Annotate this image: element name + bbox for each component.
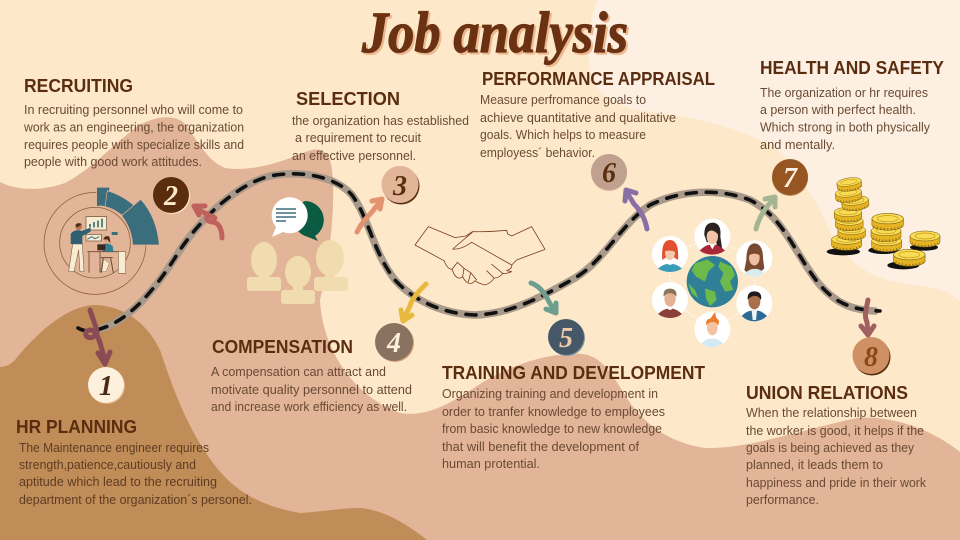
text block: employess´ behavior. <box>480 145 595 160</box>
outer rings <box>44 192 146 294</box>
text block <box>480 92 676 160</box>
background: salmon wave shape <box>0 117 960 540</box>
coin shadows <box>827 244 938 269</box>
badge 8: 8 <box>864 342 878 373</box>
badge 8 <box>852 337 890 376</box>
heading: PERFORMANCE APPRAISAL <box>482 69 715 89</box>
small coin lower <box>894 249 925 266</box>
panel: performance appraisal <box>480 69 715 160</box>
illustration: HR team at work <box>44 187 159 294</box>
panel: health and safety <box>760 58 944 152</box>
background: brown hill <box>0 305 427 540</box>
title: Job analysis <box>363 2 630 67</box>
people silhouettes <box>247 240 348 304</box>
text block: a requirement to recuit <box>295 130 421 145</box>
white speech bubble <box>272 197 308 237</box>
tall stack <box>832 176 869 250</box>
avatar: woman red hair <box>652 236 688 272</box>
panel: selection <box>292 89 469 163</box>
text block: a person with perfect health. <box>760 102 916 117</box>
badge 6: 6 <box>602 158 616 189</box>
badge 3: 3 <box>392 171 407 202</box>
text block: goals is being achieved as they <box>746 440 914 455</box>
arrow 4 <box>401 284 426 321</box>
text block: Measure perfromance goals to <box>480 92 646 107</box>
text block: In recruiting personnel who will come to <box>24 102 243 117</box>
heading: HR PLANNING <box>16 417 137 437</box>
text block <box>23 102 244 169</box>
text block: A compensation can attract and <box>211 364 386 379</box>
illustration: globe with diverse people <box>652 219 772 347</box>
text block: work as an engineering, the organization <box>23 120 244 134</box>
text block: planned, it leads them to <box>746 457 883 472</box>
road: winding path <box>78 174 880 331</box>
avatar: woman brown hair <box>736 240 772 276</box>
middle stack <box>871 213 903 252</box>
badge 4: 4 <box>386 328 401 359</box>
arrow 5 <box>531 283 556 313</box>
arrow 8 <box>861 300 874 335</box>
globe <box>687 256 738 307</box>
heading: TRAINING AND DEVELOPMENT <box>442 363 705 383</box>
text block <box>19 440 252 507</box>
text block <box>746 405 926 507</box>
text block <box>292 113 469 163</box>
heading: RECRUITING <box>24 76 133 96</box>
badge 3 <box>382 166 420 204</box>
text block: department of the organization´s personel. <box>19 492 252 507</box>
text block: people with good work attitudes. <box>24 154 202 169</box>
text block: Organizing training and development in <box>442 386 658 401</box>
heading: COMPENSATION <box>212 337 353 357</box>
arrow 1 <box>86 310 110 364</box>
text block: happiness and pride in their work <box>746 475 926 490</box>
panel: hr planning <box>16 417 252 507</box>
text block: The Maintenance engineer requires <box>19 440 209 455</box>
text block: the worker is good, it helps if the <box>746 423 924 438</box>
panel: compensation <box>211 337 412 414</box>
text block: and increase work efficiency as well. <box>211 399 407 414</box>
heading: HEALTH AND SAFETY <box>760 58 944 78</box>
badge 2: 2 <box>163 181 178 212</box>
text block: achieve quantitative and qualitative <box>480 110 676 125</box>
green speech bubble <box>293 201 324 241</box>
connecting dots <box>670 237 754 329</box>
text block: motivate quality personnel to attend <box>211 382 412 397</box>
badge 4 <box>375 323 414 362</box>
text block: performance. <box>746 492 819 507</box>
text block: and mentally. <box>760 137 835 152</box>
seated woman at desk <box>87 236 126 273</box>
arrow 7 <box>756 197 775 229</box>
text block: an effective personnel. <box>292 148 416 163</box>
text block <box>211 364 412 414</box>
badge 5 <box>548 319 585 356</box>
text block: from basic knowledge to new knowledge <box>442 421 662 436</box>
illustration: stacks of gold coins <box>827 176 940 269</box>
badge 1: 1 <box>99 371 113 402</box>
text block <box>442 386 665 471</box>
heading: UNION RELATIONS <box>746 383 908 403</box>
badge 1 <box>88 367 125 404</box>
badge 7 <box>772 159 808 196</box>
text block: requires people with specialize skills and <box>24 137 244 152</box>
text block: that will benefit the development of <box>442 439 639 454</box>
fan segments <box>97 187 159 245</box>
icon: handshake outline <box>415 227 545 285</box>
badge 5: 5 <box>559 323 573 354</box>
text block: strength,patience,cautiously and <box>19 457 196 472</box>
text block: When the relationship between <box>746 405 917 420</box>
badge 2 <box>153 177 190 214</box>
text block: Which strong in both physically <box>760 120 930 134</box>
small coin right <box>910 231 940 247</box>
avatar: woman dark hair <box>694 219 730 255</box>
chart boards <box>86 217 118 241</box>
panel: recruiting <box>23 76 244 169</box>
text block: human protential. <box>442 456 540 471</box>
heading: SELECTION <box>296 89 400 109</box>
arrow 3 <box>357 199 382 232</box>
title: Job analysis <box>361 0 628 65</box>
text block <box>760 85 930 152</box>
avatar: man light brown hair <box>652 282 688 318</box>
text block: The organization or hr requires <box>760 85 928 100</box>
text block: the organization has established <box>292 113 469 128</box>
arrow 6 <box>625 190 647 229</box>
arrow 2 <box>194 206 222 238</box>
avatar: man orange hair <box>694 311 730 347</box>
panel: training and development <box>442 363 705 471</box>
standing man <box>69 223 91 272</box>
background: light top-right shape <box>588 0 960 302</box>
text block: order to tranfer knowledge to employees <box>442 404 665 419</box>
text block: goals. Which helps to measure <box>480 127 646 142</box>
badge 6 <box>591 154 627 191</box>
badge 7: 7 <box>783 163 798 194</box>
avatar: man dark skin <box>736 285 772 321</box>
text block: aptitude which lead to the recruiting <box>19 474 217 489</box>
icon: people with chat bubbles <box>247 197 348 304</box>
panel: union relations <box>746 383 926 507</box>
